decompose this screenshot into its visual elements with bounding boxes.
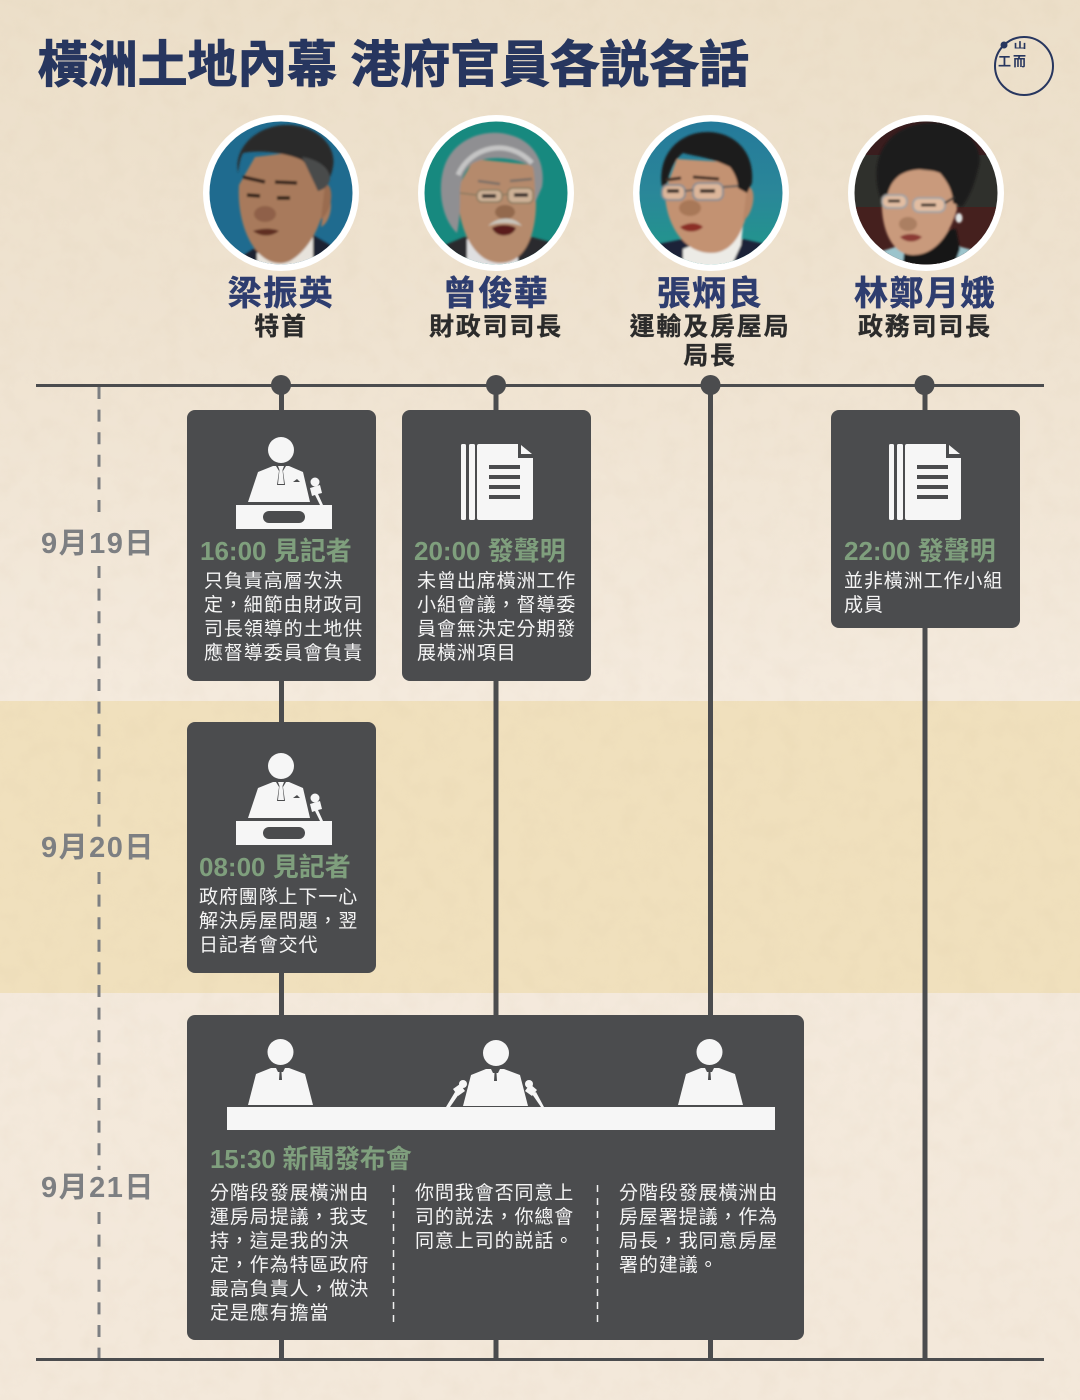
text: 張炳良 statement: 分階段發展橫洲由 xyxy=(619,1183,778,1204)
icon: publisher logo: 山 xyxy=(1014,41,1027,50)
heading: 16:00 見記者: 16:00 見記者 xyxy=(200,536,352,566)
text: 梁振英 statement: 最高負責人，做決 xyxy=(210,1279,369,1300)
text: 曾俊華 statement: 同意上司的説話。 xyxy=(415,1231,574,1252)
icon: publisher logo: 而 xyxy=(1013,54,1026,69)
text: 梁振英 statement: 定，細節由財政司 xyxy=(204,595,363,616)
text: 梁振英 statement: 持，這是我的決 xyxy=(210,1231,349,1252)
text: 梁振英 statement: 分階段發展橫洲由 xyxy=(210,1183,369,1204)
date: 9月21日: 9月21日 xyxy=(41,1172,155,1204)
text: 梁振英 statement: 解決房屋問題，翌 xyxy=(199,911,358,932)
heading: 22:00 發聲明: 22:00 發聲明 xyxy=(844,536,996,566)
portrait: 張炳良 xyxy=(633,115,789,271)
role: 財政司司長: 財政司司長 xyxy=(429,313,563,341)
heading: 15:30 新聞發布會: 15:30 新聞發布會 xyxy=(210,1144,412,1174)
icon: publisher logo xyxy=(994,36,1054,96)
text: 張炳良 statement: 房屋署提議，作為 xyxy=(619,1207,778,1228)
role: 運輸及房屋局局長: 運輸及房屋局 xyxy=(630,313,790,341)
text: 曾俊華 statement: 你問我會否同意上 xyxy=(415,1183,574,1204)
icon: three officials at press table xyxy=(227,1039,775,1130)
panel: 梁振英 9月19日 見記者 xyxy=(187,410,376,681)
text: 梁振英 statement: 司長領導的土地供 xyxy=(204,619,363,640)
text: 梁振英 statement: 只負責高層次決 xyxy=(204,571,343,592)
text: 林鄭月娥 statement: 並非橫洲工作小組 xyxy=(844,571,1003,592)
text: 梁振英 statement: 定，作為特區政府 xyxy=(210,1255,369,1276)
text: 梁振英 statement xyxy=(210,1182,369,1324)
icon: publisher logo: 工 xyxy=(998,54,1011,69)
panel: 林鄭月娥 9月19日 發聲明 xyxy=(831,410,1020,628)
text: 梁振英 statement: 政府團隊上下一心 xyxy=(199,887,358,908)
text: 曾俊華 statement: 展橫洲項目 xyxy=(417,643,517,664)
portrait: 林鄭月娥 xyxy=(848,115,1004,271)
text: 林鄭月娥 statement xyxy=(844,571,1003,616)
panel: 梁振英 9月20日 見記者 xyxy=(187,722,376,973)
name: 張炳良: 張炳良 xyxy=(657,275,763,313)
text: 張炳良 statement xyxy=(619,1182,778,1276)
text: 梁振英 statement xyxy=(199,886,358,956)
text: 曾俊華 statement: 小組會議，督導委 xyxy=(417,595,576,616)
text: 梁振英 statement: 運房局提議，我支 xyxy=(210,1207,369,1228)
heading: 20:00 發聲明: 20:00 發聲明 xyxy=(414,536,566,566)
text: 張炳良 statement: 署的建議。 xyxy=(619,1255,719,1276)
portrait: 梁振英 xyxy=(203,115,359,271)
name: 林鄭月娥: 林鄭月娥 xyxy=(854,275,996,313)
icon: speaker at podium xyxy=(236,437,332,529)
name: 曾俊華: 曾俊華 xyxy=(443,275,549,313)
panel: 曾俊華 9月19日 發聲明 xyxy=(402,410,591,681)
panel: 9月21日 新聞發布會 xyxy=(187,1015,804,1340)
name: 梁振英: 梁振英 xyxy=(228,275,334,313)
text: 林鄭月娥 statement: 成員 xyxy=(844,595,884,616)
text: 梁振英 statement: 應督導委員會負責 xyxy=(204,643,363,664)
role: 運輸及房屋局局長: 局長 xyxy=(683,342,737,370)
date: 9月19日: 9月19日 xyxy=(41,528,155,560)
text: 曾俊華 statement: 員會無決定分期發 xyxy=(417,619,576,640)
role: 政務司司長: 政務司司長 xyxy=(858,313,992,341)
text: 曾俊華 statement xyxy=(415,1182,574,1252)
icon: document stack xyxy=(461,444,533,520)
text: 梁振英 statement: 日記者會交代 xyxy=(199,935,318,956)
title: 橫洲土地內幕 港府官員各説各話 xyxy=(38,37,749,93)
text: 曾俊華 statement xyxy=(417,570,576,664)
role: 特首: 特首 xyxy=(254,313,308,341)
date: 9月20日: 9月20日 xyxy=(41,832,155,864)
icon: document stack xyxy=(889,444,961,520)
icon: speaker at podium xyxy=(236,753,332,845)
text: 梁振英 statement xyxy=(204,571,363,664)
text: 梁振英 statement: 定是應有擔當 xyxy=(210,1303,329,1324)
text: 張炳良 statement: 局長，我同意房屋 xyxy=(619,1231,778,1252)
text: 曾俊華 statement: 未曾出席橫洲工作 xyxy=(417,571,576,592)
portrait: 曾俊華 xyxy=(418,115,574,271)
text: 曾俊華 statement: 司的説法，你總會 xyxy=(415,1207,574,1228)
role: 運輸及房屋局局長 xyxy=(630,313,790,370)
heading: 08:00 見記者: 08:00 見記者 xyxy=(199,852,351,882)
